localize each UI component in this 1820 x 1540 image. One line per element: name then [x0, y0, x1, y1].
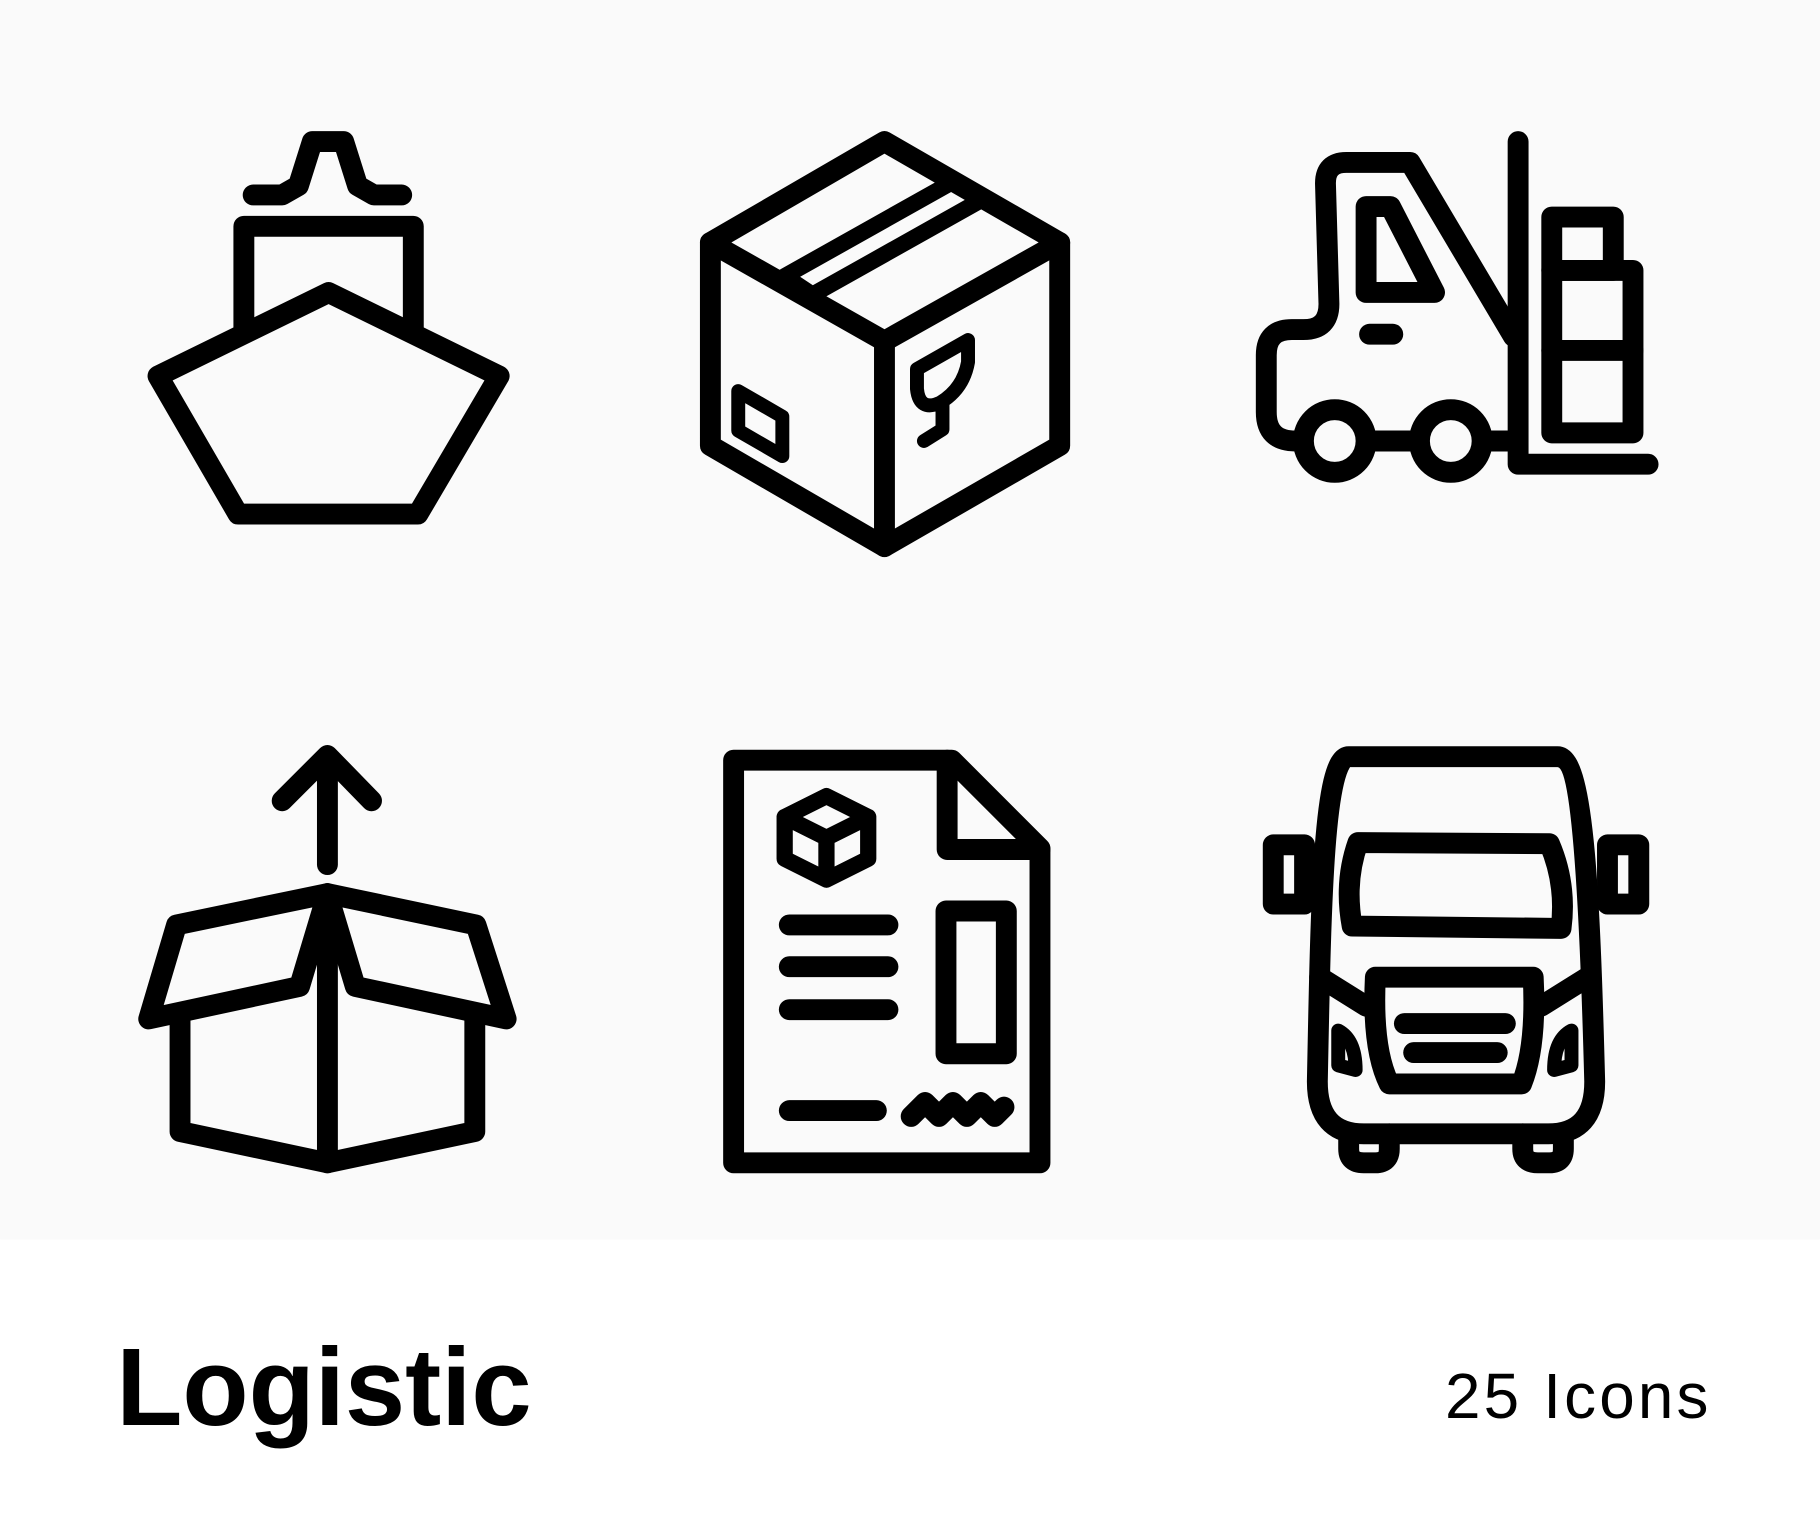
icon: forklift — [1266, 142, 1648, 472]
icon: ship — [158, 142, 499, 514]
subtitle: icon count: 25 Icons — [1445, 1360, 1708, 1432]
icon: open box with arrow — [149, 755, 506, 1163]
title: Logistic — [116, 1326, 532, 1449]
icon: truck front — [1273, 757, 1639, 1163]
icon: shipping document — [734, 760, 1040, 1163]
icon: cardboard box — [710, 142, 1060, 547]
